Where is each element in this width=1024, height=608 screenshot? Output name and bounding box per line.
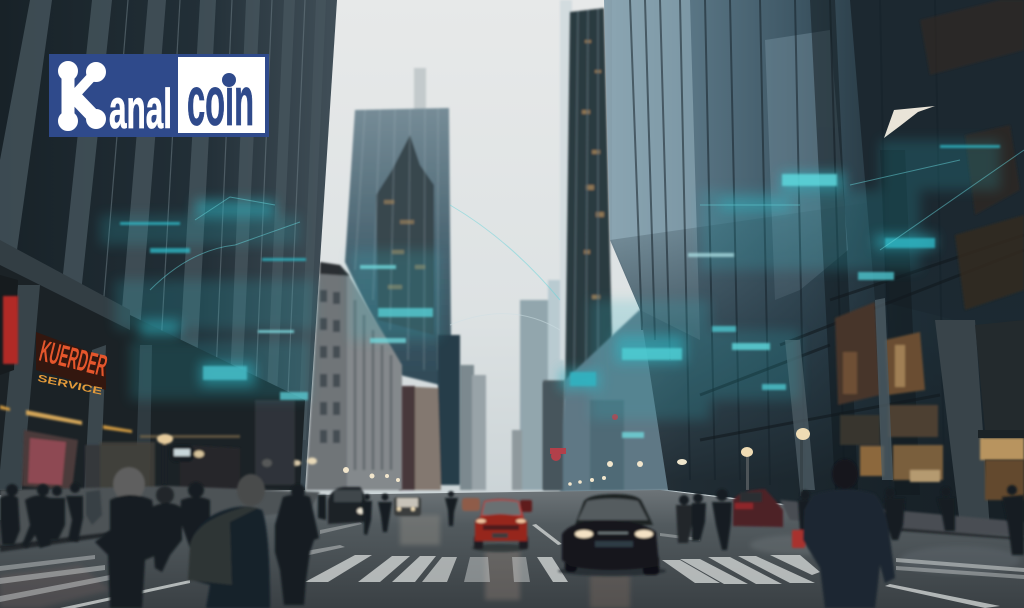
lower darkening (610, 180, 1024, 530)
digital data overlays (100, 140, 1024, 438)
central glass tower (345, 108, 451, 385)
person behind woman (150, 486, 182, 572)
logo: Kanal coin: coin (187, 62, 254, 140)
logo white panel (178, 57, 265, 133)
logo word anal: anal (109, 77, 172, 140)
warm interior glow windows (835, 0, 1024, 482)
sidewalks (0, 486, 1024, 552)
right dark window tower (565, 8, 612, 400)
street lamps (343, 414, 810, 496)
floor lines on facade (700, 235, 1024, 440)
group right of street (676, 485, 1024, 555)
right lower street buildings (543, 300, 700, 492)
glass mullions (630, 0, 945, 515)
small pedestrians at center (318, 491, 458, 535)
man in dark suit (275, 484, 319, 605)
building columns (0, 0, 326, 440)
logo: Kanal coin (49, 54, 269, 140)
distant white car (394, 497, 532, 516)
person walking mid (180, 482, 210, 552)
ground road (0, 490, 1024, 608)
red parked car (733, 489, 783, 527)
logo coin dot (222, 73, 236, 87)
red suitcase (792, 530, 805, 548)
left dark skyscraper (0, 0, 337, 495)
man in dark coat foreground (803, 459, 895, 608)
logo blue background (49, 54, 269, 137)
distant hazy towers (414, 0, 572, 490)
crowd far left (0, 483, 102, 548)
logo K mark (58, 62, 106, 130)
woman with grey hair (95, 467, 158, 608)
backpack walker (188, 474, 270, 608)
pedestrians (0, 459, 1024, 608)
dark left car (328, 487, 366, 524)
black car (558, 494, 666, 576)
red car (472, 499, 528, 552)
lower storefront (0, 245, 305, 495)
left dark skyscraper: KUERDER (36, 335, 110, 383)
grey stone building (306, 262, 402, 490)
right corner column and store (935, 320, 990, 530)
store sign: SERVICE (36, 373, 104, 398)
store sign (36, 332, 110, 398)
dark and brown mid-distance buildings (399, 335, 460, 490)
right glass skyscraper (604, 0, 1024, 530)
shop lights (0, 400, 317, 492)
crosswalk stripes (0, 522, 1024, 608)
road reflections (0, 515, 1020, 608)
